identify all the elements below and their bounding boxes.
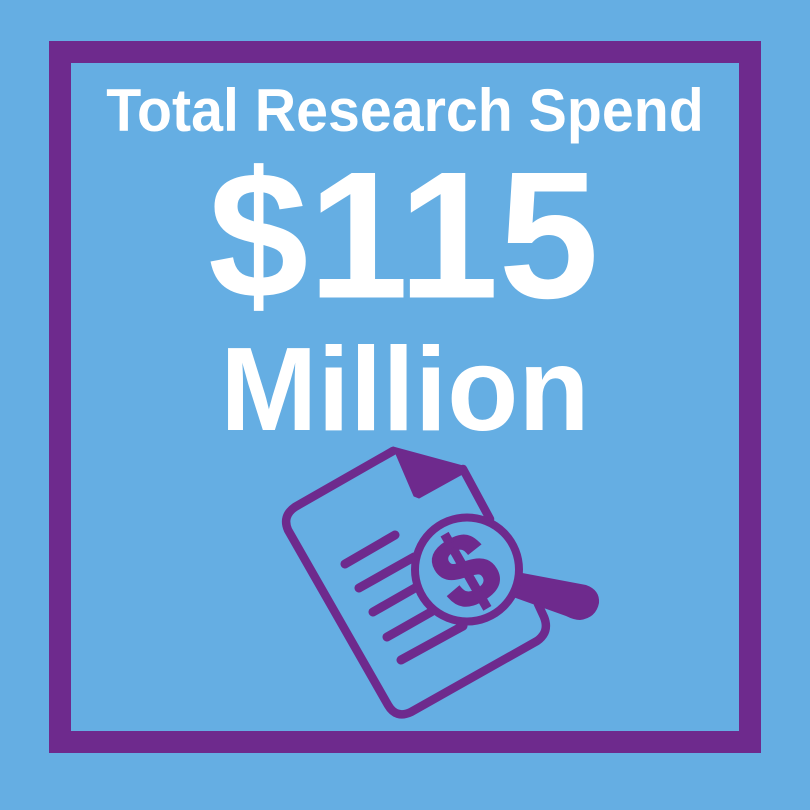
document text lines [345, 535, 463, 660]
document folded corner [393, 447, 466, 498]
document outline [286, 451, 546, 714]
icon: document under magnifying glass with dollar sign [286, 447, 599, 714]
big number: $115: $115 [208, 135, 599, 337]
label: million: Million [220, 322, 590, 455]
magnifying glass handle [513, 572, 599, 620]
magnifying glass lens [415, 518, 519, 622]
heading: total research spend: Total Research Spend [106, 78, 704, 144]
dollar sign: $ [413, 508, 518, 633]
panel: purple frame [60, 52, 750, 742]
